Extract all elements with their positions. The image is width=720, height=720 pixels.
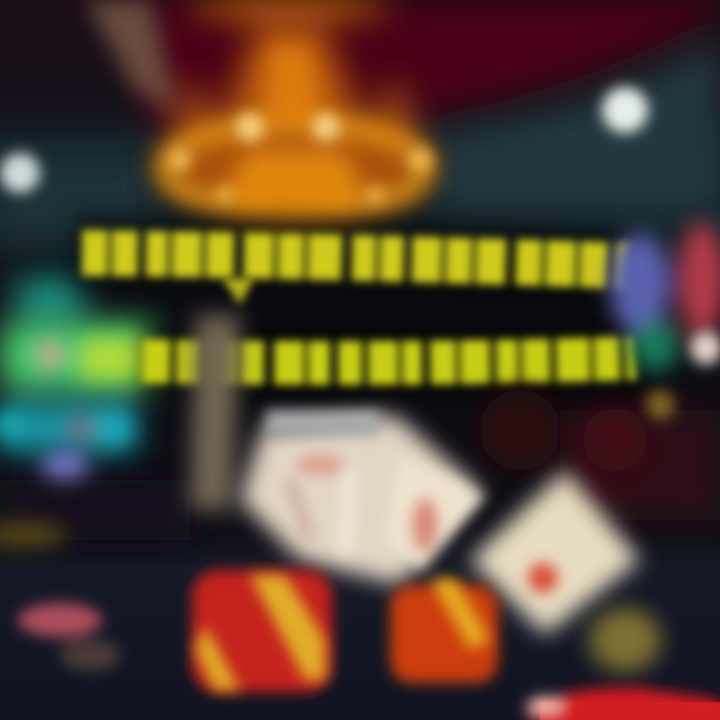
right decorations [480, 222, 720, 472]
poker chip: left large [192, 570, 332, 692]
vertical stand behind cards [190, 315, 240, 510]
ceiling lights [0, 87, 648, 193]
heading line 2: illegible blurred title [140, 358, 640, 363]
playing cards: centre fan [240, 410, 485, 585]
light: left [0, 153, 40, 193]
chandelier [160, 0, 431, 225]
light: right [602, 87, 648, 133]
playing card: right [470, 470, 640, 635]
card: left small [18, 603, 120, 671]
card: bottom red [525, 688, 720, 720]
left neon panels [0, 279, 155, 546]
poker chip: right small [390, 578, 498, 683]
gold coins pile [589, 608, 661, 672]
heading line 1: illegible blurred title [75, 252, 635, 305]
beam: ceiling support [85, 0, 180, 115]
